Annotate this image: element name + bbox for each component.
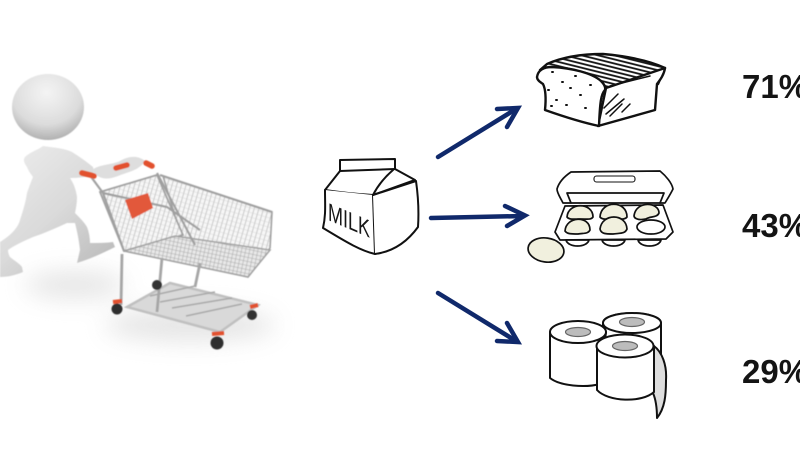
arrow to bread xyxy=(438,108,518,157)
cart top rails xyxy=(89,173,272,251)
icon: toilet paper rolls xyxy=(550,313,666,418)
hands on the handle xyxy=(92,157,145,178)
shopping cart xyxy=(82,157,272,350)
icon: egg carton xyxy=(527,171,673,264)
icon: bread loaf xyxy=(537,54,665,126)
icon: milk carton xyxy=(323,159,418,254)
wheels xyxy=(112,280,258,350)
arrow to toilet paper xyxy=(438,293,518,342)
floor shadow xyxy=(25,272,275,341)
eggs xyxy=(527,204,659,264)
arrow to eggs xyxy=(431,206,525,226)
red card xyxy=(125,193,153,219)
handle xyxy=(82,163,152,176)
lower rack xyxy=(127,283,258,332)
label: MILK: MILK xyxy=(328,197,370,244)
illustration: person pushing shopping cart xyxy=(0,74,275,350)
person xyxy=(0,74,115,277)
